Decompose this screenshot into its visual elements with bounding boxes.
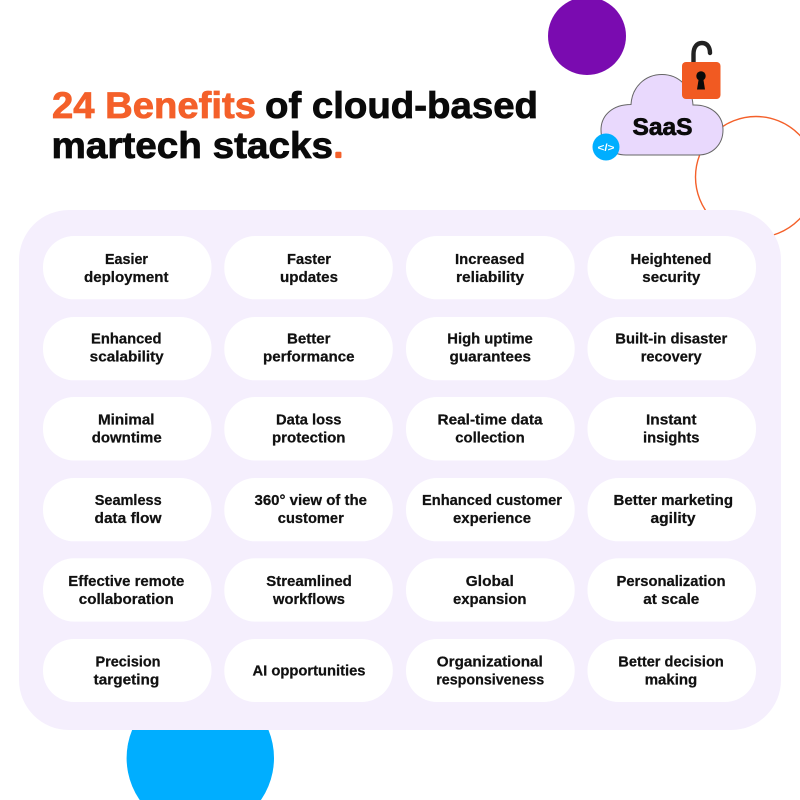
benefit: Seamless data flow: data flow — [94, 510, 162, 527]
benefit: Seamless data flow — [43, 478, 212, 541]
benefit: Enhanced customer experience — [406, 478, 575, 541]
decorative purple circle — [548, 0, 626, 75]
icon: open padlock — [682, 43, 720, 99]
benefit: Better performance — [224, 317, 393, 380]
benefit: Personalization at scale — [588, 558, 756, 622]
benefit: Minimal downtime: downtime — [92, 429, 162, 446]
benefit: Minimal downtime — [43, 397, 212, 460]
benefit: Increased reliability: Increased — [455, 251, 524, 268]
benefit: Easier deployment: Easier — [105, 251, 148, 268]
decorative blue circle — [127, 684, 274, 800]
benefit: Better performance: Better — [287, 330, 331, 348]
benefit: Effective remote collaboration: collaboration — [79, 591, 174, 608]
title highlight: 24 Benefits: 24 Benefits — [52, 84, 256, 126]
benefit: Instant insights — [588, 397, 756, 460]
benefit: Faster updates — [224, 236, 393, 299]
benefit: Organizational responsiveness: Organizational — [437, 654, 543, 670]
benefit: AI opportunities: AI opportunities — [252, 662, 366, 679]
benefit: Enhanced customer experience: Enhanced customer — [422, 492, 562, 509]
benefit: Global expansion: Global — [466, 573, 514, 590]
benefit: Built-in disaster recovery — [588, 317, 756, 380]
benefit: Organizational responsiveness: responsiveness — [436, 671, 544, 688]
benefit: Streamlined workflows — [224, 558, 393, 622]
benefit: Increased reliability: reliability — [456, 269, 525, 286]
benefit: Faster updates: Faster — [287, 251, 331, 268]
benefit: Real-time data collection: collection — [455, 429, 525, 446]
benefit: High uptime guarantees: guarantees — [450, 348, 531, 365]
benefit: Easier deployment: deployment — [84, 269, 168, 286]
panel: benefits — [19, 210, 781, 730]
benefit: Easier deployment — [43, 236, 212, 299]
benefit: Better decision making: making — [645, 671, 697, 688]
benefit: Better decision making — [588, 639, 756, 702]
benefit: Global expansion — [406, 558, 575, 622]
benefit: Better decision making: Better decision — [618, 654, 724, 670]
icon: cloud — [601, 74, 723, 155]
benefit: Streamlined workflows: workflows — [272, 591, 345, 608]
benefit: Enhanced scalability: Enhanced — [91, 330, 162, 348]
benefit: Precision targeting: targeting — [94, 671, 159, 688]
benefit: 360 degree view of the customer — [224, 478, 393, 541]
benefit: Effective remote collaboration — [43, 558, 212, 622]
icon: code badge: </> — [598, 142, 614, 154]
benefit: Better performance: performance — [263, 348, 354, 365]
title period: . — [334, 132, 342, 163]
benefit: Global expansion: expansion — [453, 591, 526, 608]
panel background — [19, 210, 781, 730]
benefit: Instant insights: insights — [643, 429, 700, 446]
benefit: Data loss protection: Data loss — [276, 412, 342, 428]
title — [52, 84, 538, 166]
benefit: AI opportunities — [224, 639, 393, 702]
benefit: Built-in disaster recovery: recovery — [641, 348, 702, 365]
title line one remainder: of cloud-based — [265, 84, 538, 126]
benefit: Effective remote collaboration: Effective remote — [68, 573, 184, 590]
benefit: High uptime guarantees — [406, 317, 575, 380]
benefit: Organizational responsiveness — [406, 639, 575, 702]
benefit: Personalization at scale: at scale — [643, 591, 699, 608]
benefit: Heightened security: security — [642, 269, 701, 286]
benefit: Minimal downtime: Minimal — [98, 412, 154, 428]
benefit: Heightened security — [588, 236, 756, 299]
benefit: Heightened security: Heightened — [630, 251, 712, 268]
benefit: 360 degree view of the customer: 360° view of the — [254, 492, 367, 509]
benefit: Enhanced scalability — [43, 317, 212, 380]
cloud label: SaaS — [632, 114, 692, 141]
SaaS cloud illustration — [592, 43, 723, 160]
decorative orange ring — [696, 116, 800, 238]
benefit: Enhanced scalability: scalability — [90, 348, 164, 365]
benefit: Better marketing agility — [588, 478, 756, 541]
benefit: Increased reliability — [406, 236, 575, 299]
benefit: 360 degree view of the customer: customer — [278, 510, 344, 527]
benefit: Seamless data flow: Seamless — [95, 492, 162, 509]
benefit: Built-in disaster recovery: Built-in disaster — [615, 330, 727, 348]
benefit: Precision targeting: Precision — [96, 654, 160, 670]
benefit: Data loss protection: protection — [272, 429, 346, 446]
benefit: Instant insights: Instant — [646, 412, 697, 428]
benefit: Real-time data collection: Real-time data — [438, 412, 543, 428]
benefit: High uptime guarantees: High uptime — [447, 330, 533, 348]
benefit: Faster updates: updates — [280, 269, 338, 286]
benefit: Streamlined workflows: Streamlined — [266, 573, 352, 590]
benefit: Personalization at scale: Personalization — [616, 573, 726, 590]
benefit: Better marketing agility: Better marketing — [614, 492, 733, 509]
benefit: Real-time data collection — [406, 397, 575, 460]
benefit: Better marketing agility: agility — [650, 510, 696, 527]
benefit: Data loss protection — [224, 397, 393, 460]
benefit: Enhanced customer experience: experience — [453, 510, 531, 527]
title line two: martech stacks — [52, 124, 333, 166]
benefit: Precision targeting — [43, 639, 212, 702]
